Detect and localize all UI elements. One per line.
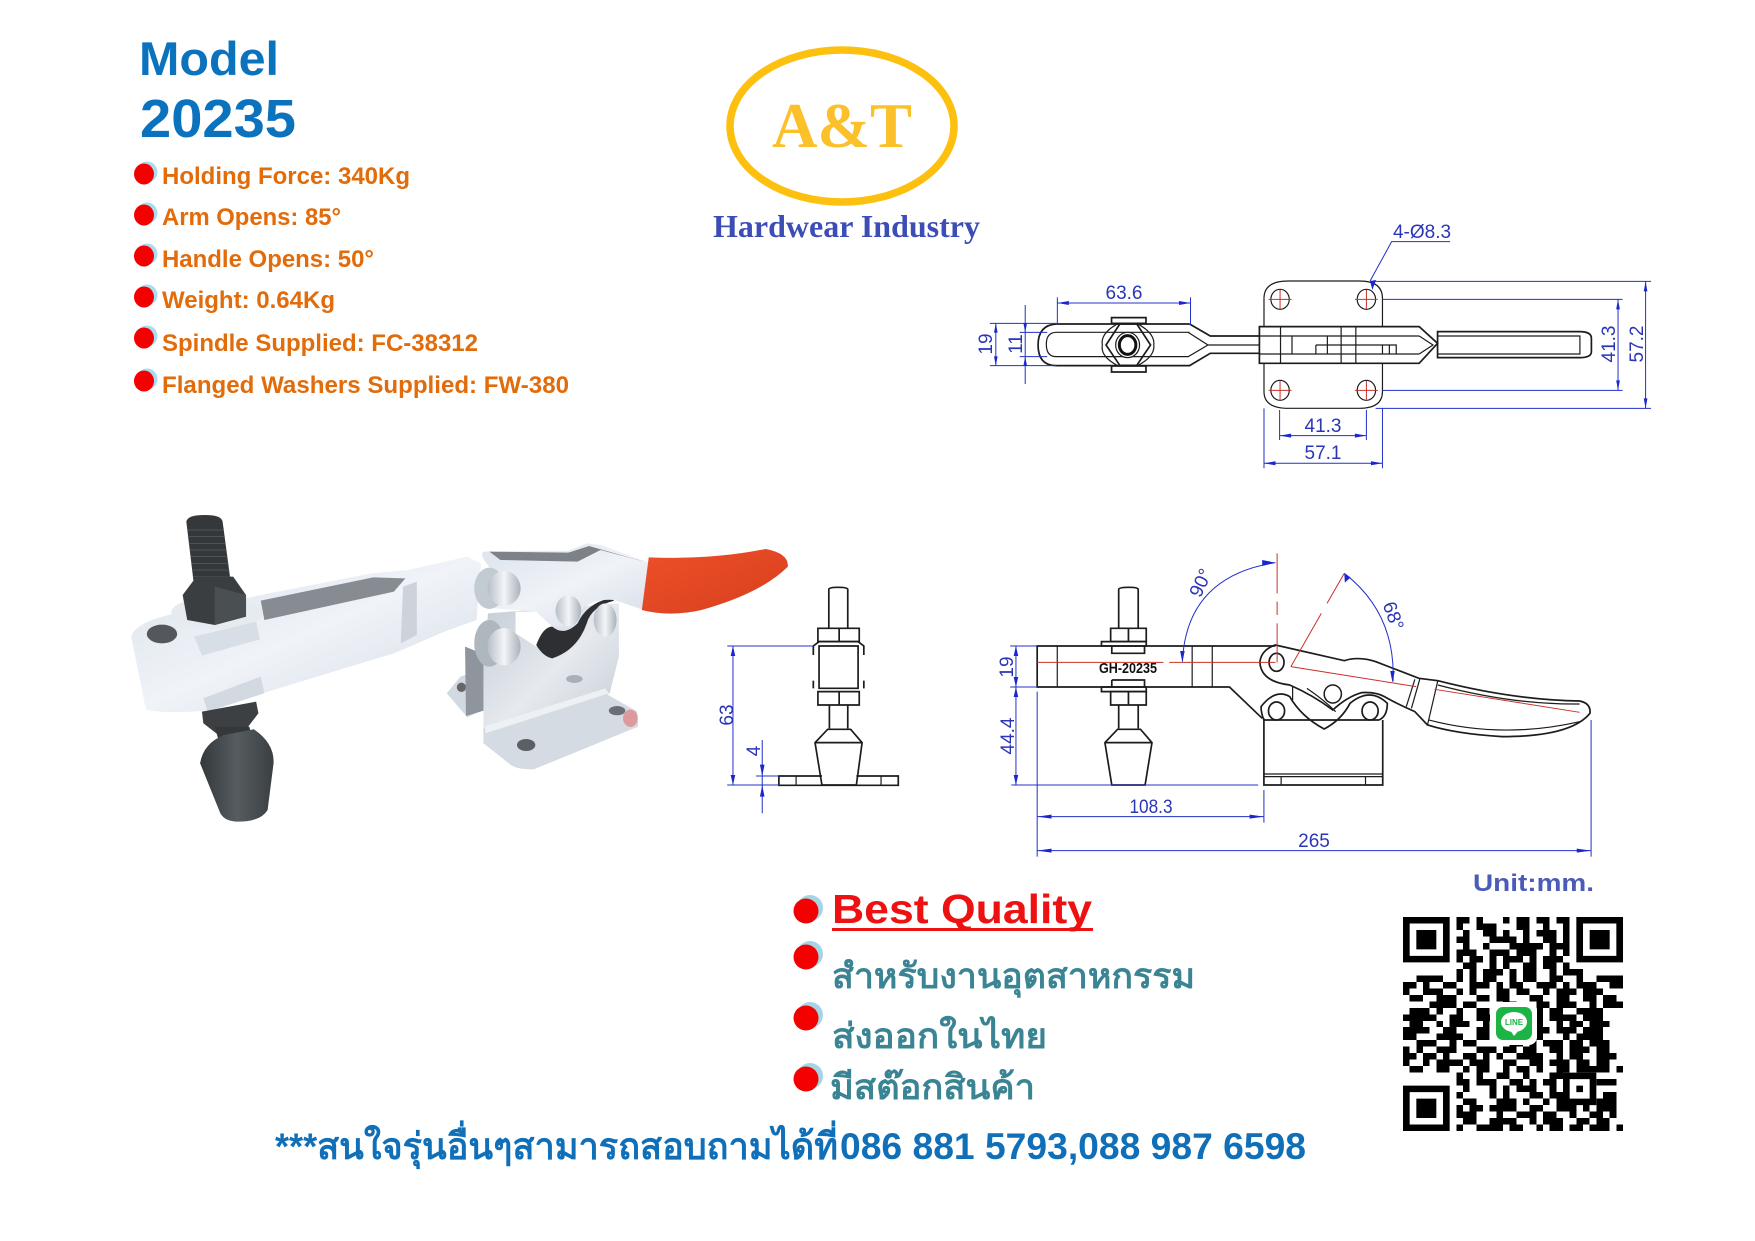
- specification list: Arm Opens: 85°: [162, 204, 341, 231]
- contact line: [275, 1120, 1306, 1170]
- feature bullets: [794, 886, 1195, 1107]
- top view dimension labels: 41.3: [1599, 326, 1620, 362]
- end view dimension labels: 4: [744, 745, 765, 756]
- product photo: toggle clamp: [131, 515, 788, 822]
- top view dimension labels: 57.1: [1305, 443, 1341, 464]
- side view labels: 44.4: [998, 717, 1019, 754]
- top view dimension labels: 11: [1006, 334, 1027, 354]
- end view dimension labels: [717, 704, 765, 756]
- logo: A&T Hardwear Industry: Hardwear Industry: [713, 208, 980, 244]
- feature bullets: สำหรับงานอุตสาหกรรม: [832, 957, 1195, 998]
- specification list: Spindle Supplied: FC-38312: [162, 330, 478, 357]
- top view dimension labels: 19: [976, 333, 997, 355]
- logo: A&T Hardwear Industry: A&T: [772, 91, 912, 161]
- feature bullets: ส่งออกในไทย: [832, 1015, 1047, 1056]
- side view labels: 108.3: [1130, 797, 1172, 818]
- title: model number: Model: [139, 32, 279, 85]
- logo: A&T Hardwear Industry: [713, 50, 980, 244]
- drawing: top view with dimensions: [990, 242, 1651, 468]
- side view labels: GH-20235: [1099, 660, 1157, 677]
- specification list: Weight: 0.64Kg: [162, 287, 335, 314]
- specification list: [134, 162, 569, 399]
- side view labels: [997, 566, 1407, 852]
- title: model number: [139, 32, 296, 149]
- contact line: 086 881 5793,088 987 6598: [840, 1126, 1306, 1167]
- feature bullets: มีสต๊อกสินค้า: [830, 1068, 1035, 1107]
- drawing: end view with dimensions: [727, 587, 898, 813]
- specification list: Holding Force: 340Kg: [162, 163, 410, 190]
- side view labels: 265: [1298, 831, 1330, 852]
- specification list: Handle Opens: 50°: [162, 246, 374, 273]
- side view labels: 19: [997, 656, 1018, 678]
- top view dimension labels: 4-Ø8.3: [1393, 222, 1451, 243]
- end view dimension labels: 63: [717, 704, 738, 726]
- top view dimension labels: 41.3: [1305, 416, 1341, 437]
- title: model number: 20235: [140, 89, 296, 149]
- top view dimension labels: 57.2: [1627, 326, 1648, 362]
- specification list: Flanged Washers Supplied: FW-380: [162, 372, 569, 399]
- unit note: Unit:mm.: [1473, 870, 1594, 897]
- drawing: side view with dimensions: [1010, 553, 1591, 857]
- QR code with LINE icon: [1403, 917, 1623, 1131]
- side view labels: 90°: [1186, 566, 1217, 601]
- QR code with LINE icon: LINE: [1505, 1018, 1524, 1027]
- contact line: ***สนใจรุ่นอื่นๆสามารถสอบถามได้ที่: [275, 1120, 838, 1170]
- feature bullets: Best Quality: [832, 886, 1092, 932]
- side view labels: 68°: [1378, 599, 1407, 633]
- top view dimension labels: [976, 222, 1648, 464]
- top view dimension labels: 63.6: [1106, 283, 1142, 304]
